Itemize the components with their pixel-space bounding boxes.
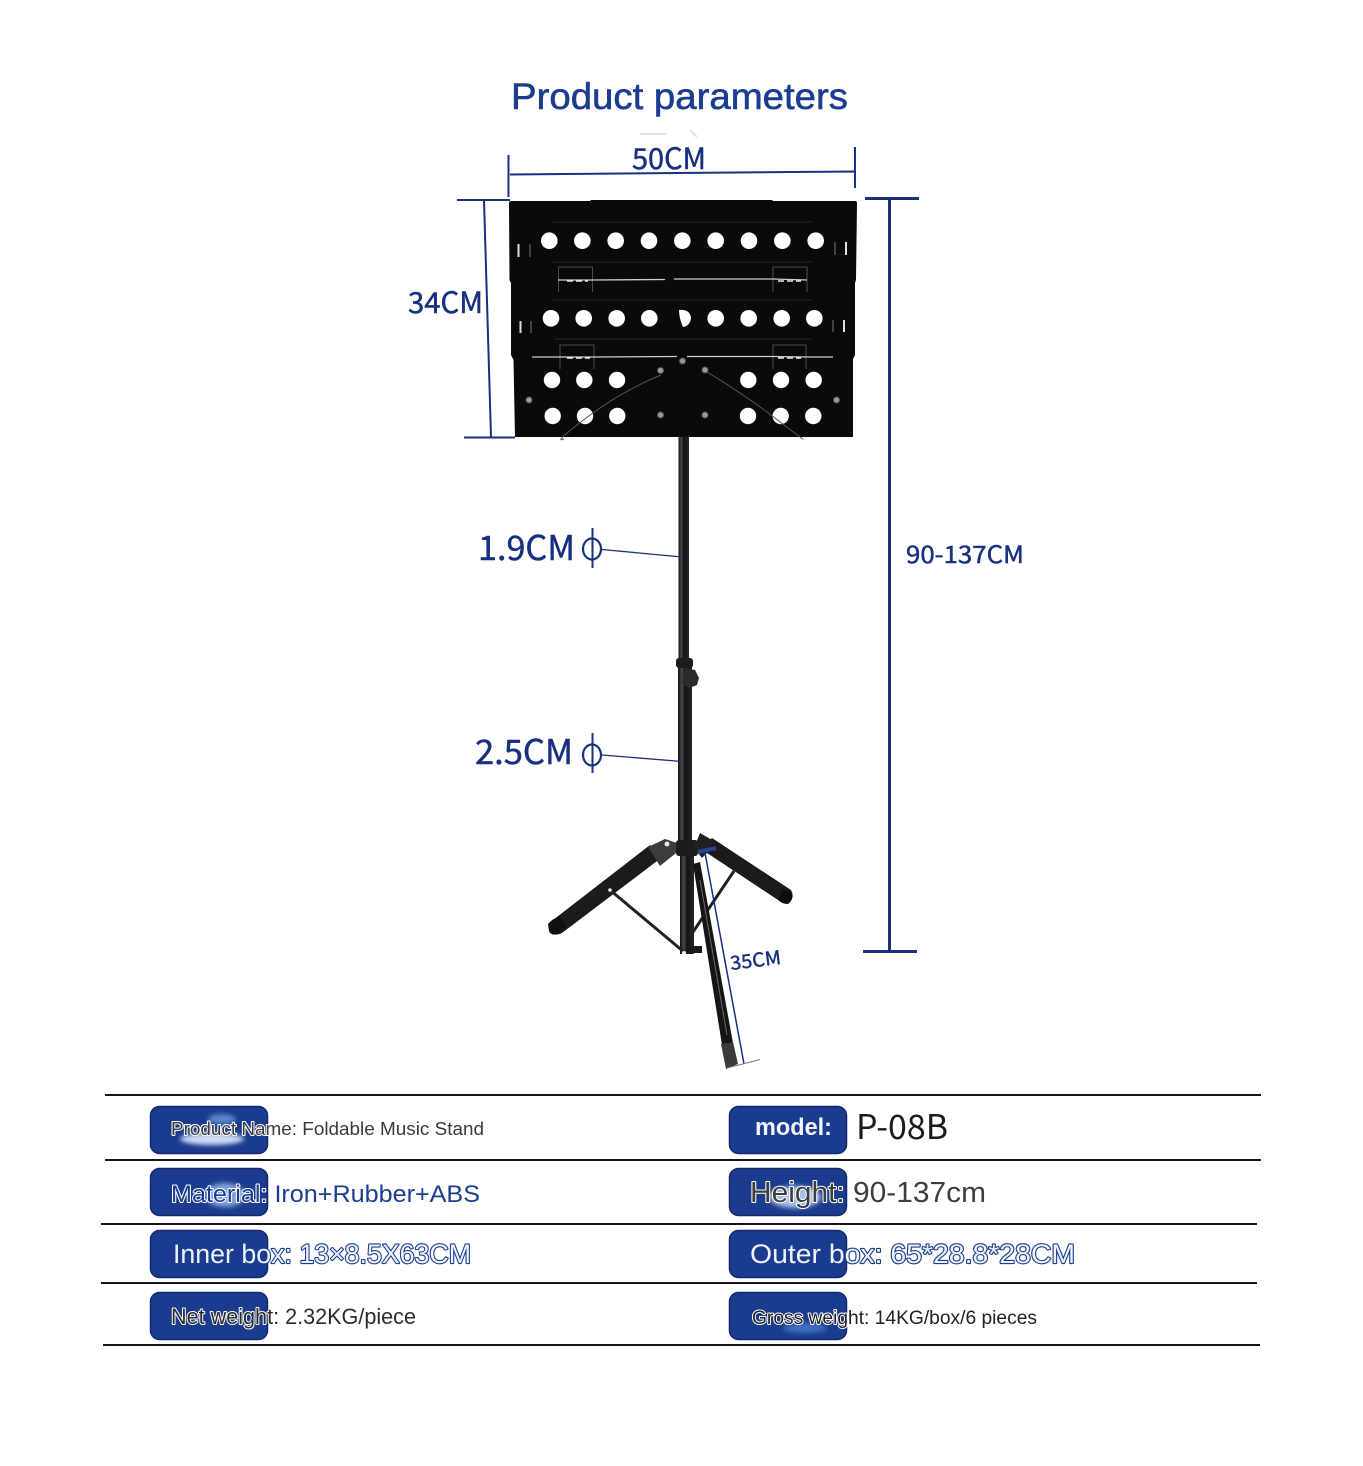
row: inner box: Inner box: 13×8.5X63CM xyxy=(173,1239,471,1269)
table rules xyxy=(101,1095,1261,1345)
top row holes xyxy=(541,232,824,249)
row: gross weight: Gross weight: 14KG/box/6 pieces xyxy=(752,1307,1037,1329)
stand pole xyxy=(676,437,699,954)
row: inner box xyxy=(150,1230,471,1278)
dimension: width 50CM xyxy=(508,130,855,197)
row: product name xyxy=(150,1106,484,1154)
row: height: Height: 90-137cm xyxy=(750,1177,986,1209)
lower holes xyxy=(544,372,822,424)
row: outer box xyxy=(730,1230,1075,1278)
dimension: width 50CM: 50CM xyxy=(632,136,706,178)
seam highlights xyxy=(532,279,833,357)
dimension: tube 1.9CM xyxy=(478,521,682,570)
row: material: Material: Iron+Rubber+ABS xyxy=(171,1181,480,1208)
row: model: model: xyxy=(755,1114,832,1141)
row: product name: Product Name: Foldable Music Stand xyxy=(171,1119,484,1139)
row: outer box: Outer box: 65*28.8*28CM xyxy=(750,1239,1075,1269)
dimension: height 90-137CM xyxy=(863,198,1024,952)
music stand desk panel xyxy=(509,200,857,440)
dimension: tube 2.5CM: 2.5CM xyxy=(475,725,573,774)
dimension: tube 1.9CM: 1.9CM xyxy=(478,521,575,570)
dimension: depth 34CM xyxy=(408,200,515,438)
row: model: P-08B xyxy=(856,1100,948,1149)
dimension: tube 2.5CM xyxy=(475,725,682,774)
dimension: leg 35CM: 35CM xyxy=(728,943,782,976)
dimension: height 90-137CM: 90-137CM xyxy=(906,535,1024,570)
row: material xyxy=(150,1168,480,1216)
tension wires xyxy=(561,372,803,440)
side slots xyxy=(518,242,846,333)
rivets xyxy=(526,358,840,418)
row: gross weight xyxy=(730,1292,1037,1340)
hinges xyxy=(558,267,807,369)
middle row holes xyxy=(543,310,823,327)
row: net weight xyxy=(150,1292,416,1340)
dimension: leg 35CM xyxy=(698,848,782,1068)
row: net weight: Net weight: 2.32KG/piece xyxy=(171,1304,416,1329)
dimension: depth 34CM: 34CM xyxy=(408,280,483,322)
tripod legs xyxy=(548,833,793,1069)
row: height xyxy=(730,1168,986,1216)
row: model xyxy=(730,1100,948,1154)
title: Product parameters xyxy=(511,76,848,117)
